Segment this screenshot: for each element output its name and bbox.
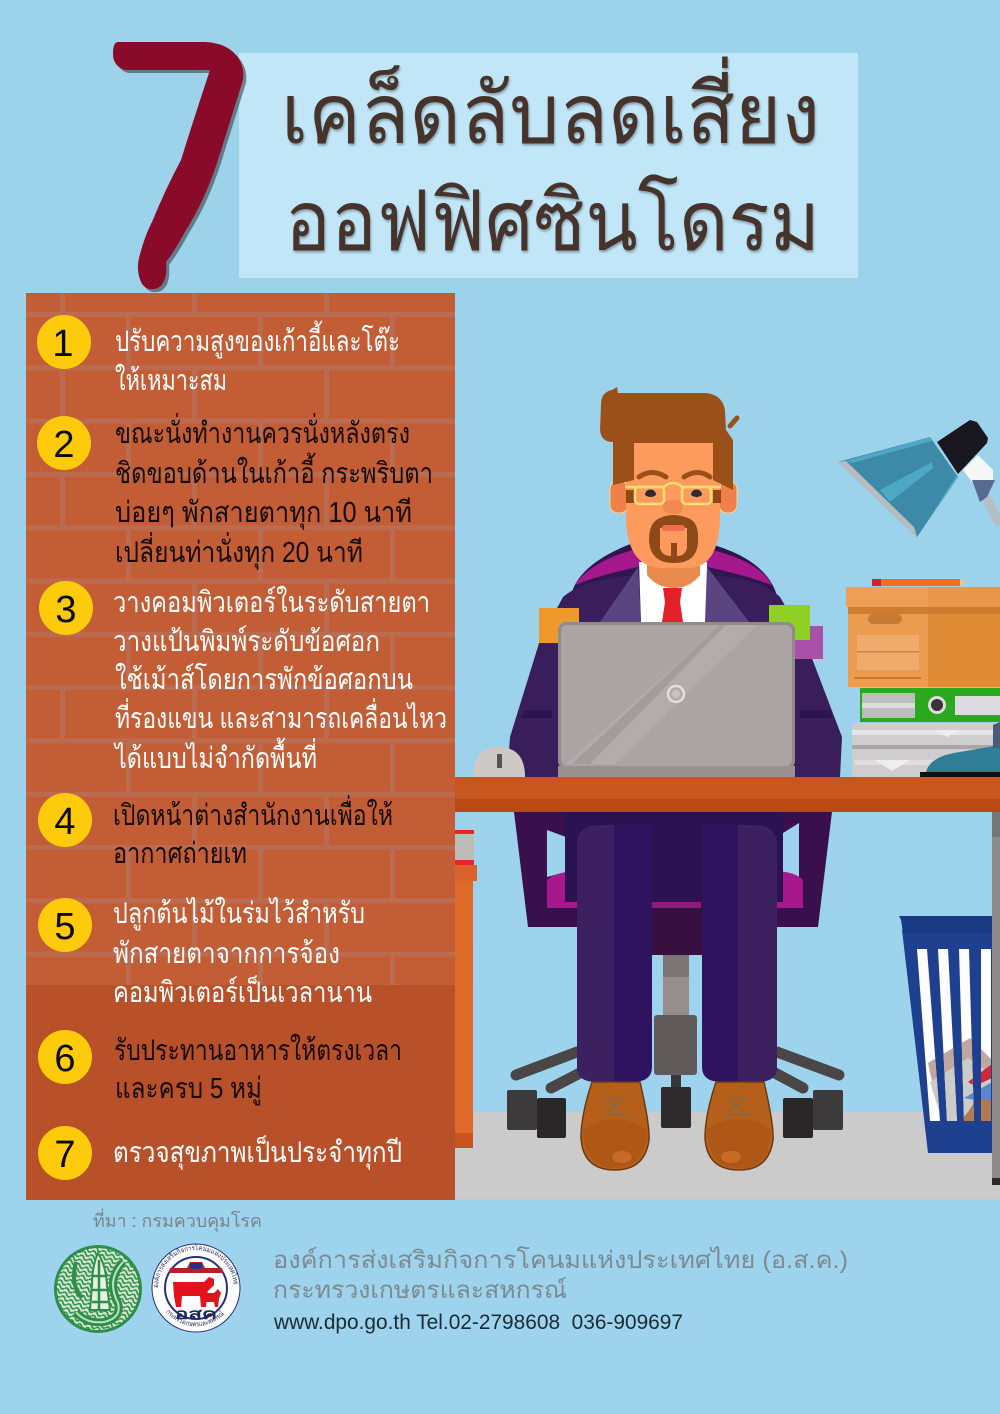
tip 1: 1 [52,323,74,365]
tip 1: ปรับความสูงของเก้าอี้และโต๊ะ [115,320,400,359]
necktie [662,588,683,622]
tip 2: 2 [53,424,75,466]
shirt [639,562,707,622]
tip 5: พักสายตาจากการจ้อง [113,938,340,970]
tip 7 [38,1126,402,1180]
logo: green seal [54,1245,142,1333]
face [626,443,720,568]
goatee [649,515,698,563]
desk lamp [838,420,1000,537]
laptop logo [668,686,684,702]
tip 3: ที่รองแขน และสามารถเคลื่อนไหว [115,698,447,735]
bin waste paper [928,1038,992,1121]
lamp base [920,722,1000,777]
neck [647,555,700,588]
numeral 7 [113,42,246,292]
jacket [507,575,842,777]
ministry name: กระทรวงเกษตรและสหกรณ์ [273,1276,567,1304]
cabinet with books [455,830,477,1148]
tip 6: 6 [54,1038,76,1080]
contact line: www.dpo.go.th Tel.02-2798608 036-909697 [273,1311,683,1334]
logo: DPO cow emblem: อสค [175,1306,217,1323]
shoes [581,1082,773,1170]
tip 5: ปลูกต้นไม้ในร่มไว้สำหรับ [113,896,365,931]
head [600,387,737,588]
green binder [860,688,1000,722]
side hair [626,490,721,503]
tip 3: 3 [55,589,77,631]
tip 2: เปลี่ยนท่านั่งทุก 20 นาที [115,532,363,570]
tip 2: ชิดขอบด้านในเก้าอี้ กระพริบตา [115,452,433,490]
tip 4: เปิดหน้าต่างสำนักงานเพื่อให้ [113,795,393,832]
waste bin [899,916,992,1153]
sleeve shading [521,710,833,718]
title text [281,56,820,268]
tip 1: ให้เหมาะสม [115,363,227,397]
tip 6: และครบ 5 หมู่ [115,1073,262,1106]
tip 7: ตรวจสุขภาพเป็นประจำทุกปี [113,1134,402,1170]
floor [455,1112,1000,1199]
title text: เคล็ดลับลดเสี่ยง [281,56,820,161]
title text: ออฟฟิศซินโดรม [285,174,820,268]
desk leg [992,812,1000,1185]
glasses [625,483,721,504]
mouse [473,747,525,777]
tip 3: วางแป้นพิมพ์ระดับข้อศอก [113,625,380,658]
logo: DPO cow emblem: กระทรวงเกษตรและสหกรณ์ [166,1310,224,1326]
chair base and wheels [507,955,843,1138]
mouth [662,525,685,531]
hair [600,387,733,490]
tip 3 [39,581,447,775]
cardboard box [846,587,1000,687]
pencil [872,579,967,586]
title panel [239,53,858,278]
tip 2: บ่อยๆ พักสายตาทุก 10 นาที [115,497,412,530]
sticky notes [539,605,823,659]
tip 2 [37,413,433,570]
tip 5: คอมพิวเตอร์เป็นเวลานาน [113,974,372,1009]
tip 3: ใช้เม้าส์โดยการพักข้อศอกบน [115,662,413,696]
eyebrows [639,472,710,477]
desk top [455,777,1000,812]
tip 4 [38,793,393,870]
tip 1 [37,315,400,397]
tip 4: อากาศถ่ายเท [113,838,247,870]
nose [663,500,683,514]
tip 3: วางคอมพิวเตอร์ในระดับสายตา [113,585,430,619]
tip 5: 5 [54,906,76,948]
logo: DPO cow emblem [152,1244,240,1332]
panel: tips on brick wall [26,293,455,1200]
stacked boxes and files [846,579,1000,777]
chair lower frame [514,812,832,955]
tip 6: รับประทานอาหารให้ตรงเวลา [114,1033,402,1067]
chair back [560,543,790,640]
ears [610,481,737,513]
eyes [645,490,702,497]
tip 4: 4 [54,801,76,843]
illustration: office worker at desk [455,387,1000,1199]
papers [852,723,1000,777]
logo: DPO cow emblem: องค์การส่งเสริมกิจการโคนมแห่งประเทศไทย [154,1244,238,1288]
tip 3: ได้แบบไม่จำกัดพื้นที่ [113,737,317,775]
lapels [600,567,749,622]
laptop [558,622,795,777]
organisation name: องค์การส่งเสริมกิจการโคนมแห่งประเทศไทย (อ.ส.ค.) [273,1246,848,1274]
tip 5 [38,896,372,1009]
tip 7: 7 [54,1134,76,1176]
tip 6 [38,1030,402,1106]
source note: ที่มา : กรมควบคุมโรค [93,1208,262,1232]
trousers [565,812,783,1082]
tip 2: ขณะนั่งทำงานควรนั่งหลังตรง [115,413,410,450]
